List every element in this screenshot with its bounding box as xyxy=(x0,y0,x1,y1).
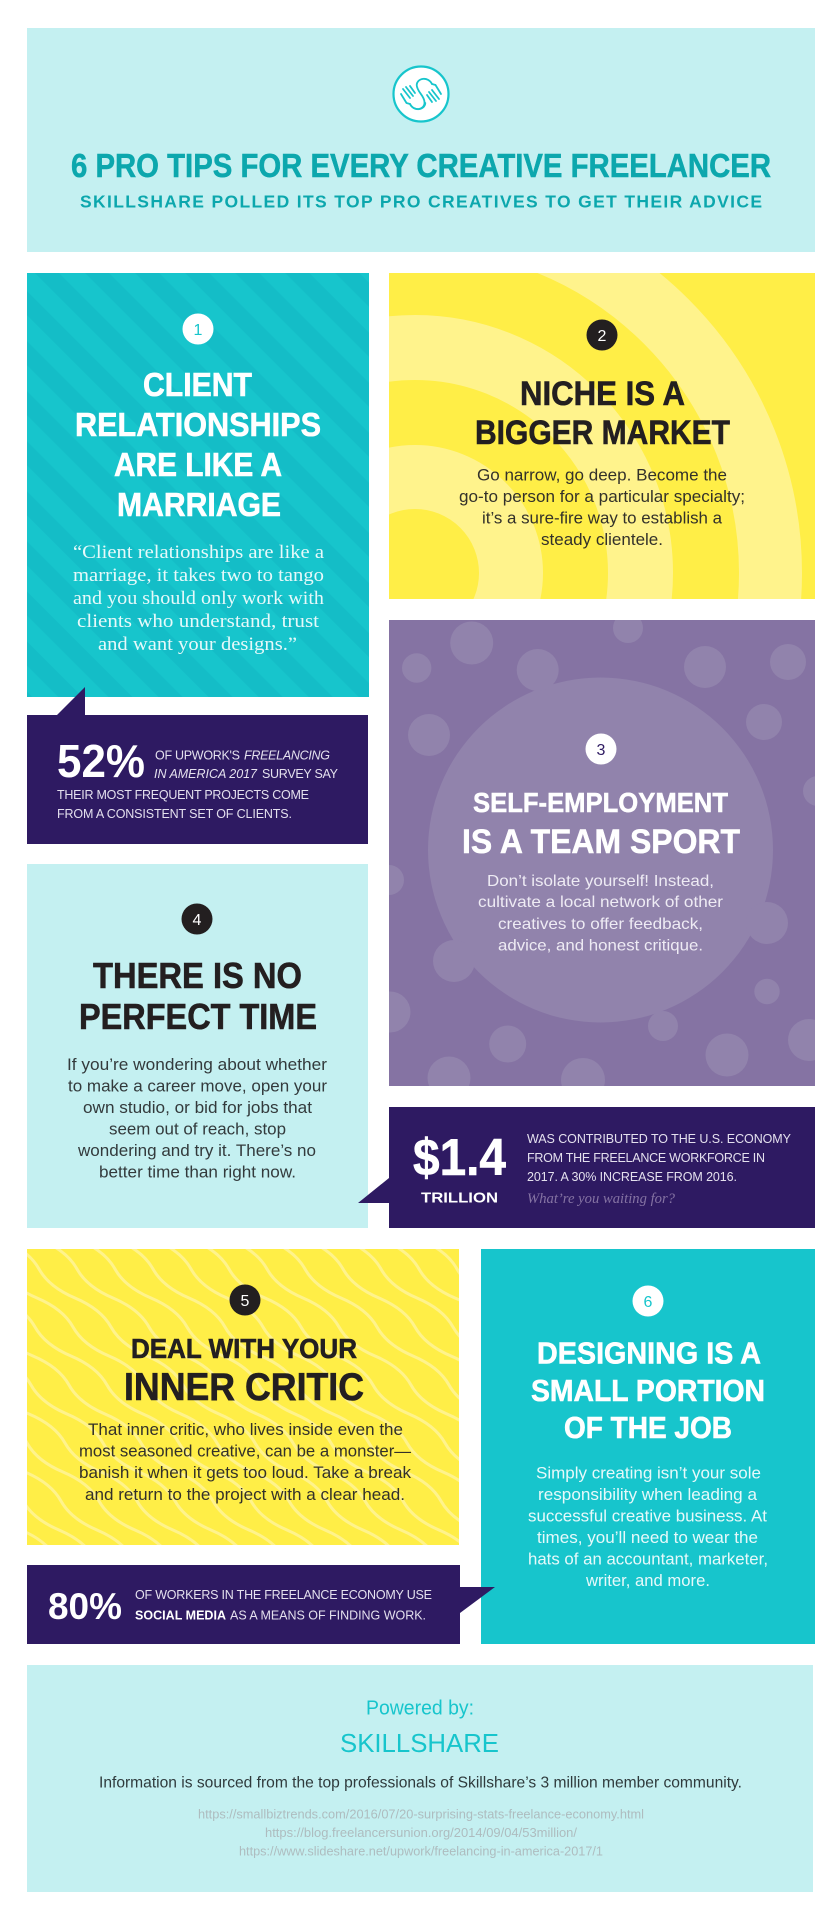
body text: advice, and honest critique. xyxy=(498,938,703,954)
quote xyxy=(73,543,324,655)
heading: SMALL PORTION xyxy=(531,1373,765,1408)
heading: MARRIAGE xyxy=(117,486,281,523)
body text: steady clientele. xyxy=(541,531,663,549)
heading: DESIGNING IS A xyxy=(537,1336,761,1370)
body text: times, you’ll need to wear the xyxy=(537,1529,758,1547)
body text: Go narrow, go deep. Become the xyxy=(477,466,727,484)
quote: and want your designs.” xyxy=(98,635,297,655)
heading xyxy=(531,1336,765,1445)
source links: https://smallbiztrends.com/2016/07/20-surprising-stats-freelance-economy.html xyxy=(198,1808,644,1822)
number badge 1: 1 xyxy=(194,322,203,339)
stat text xyxy=(527,1132,792,1184)
body text: creatives to offer feedback, xyxy=(498,916,703,933)
panel: footer xyxy=(27,1665,813,1892)
body text xyxy=(67,1056,328,1182)
powered by: Powered by: xyxy=(366,1698,474,1720)
heading xyxy=(462,787,740,861)
body text: cultivate a local network of other xyxy=(478,894,724,911)
callout: 80% stat xyxy=(27,1565,495,1644)
stat number: 52% xyxy=(57,735,145,787)
striped background xyxy=(27,273,369,697)
stat text: OF UPWORK'S xyxy=(155,748,240,762)
body text: writer, and more. xyxy=(585,1572,710,1590)
body text: to make a career move, open your xyxy=(68,1078,328,1096)
panel: tip 4 no perfect time xyxy=(27,864,368,1228)
body text: seem out of reach, stop xyxy=(109,1120,286,1138)
body text: If you’re wondering about whether xyxy=(67,1056,328,1074)
body text: it’s a sure-fire way to establish a xyxy=(482,510,723,528)
heading: THERE IS NO xyxy=(93,955,302,996)
tagline: What’re you waiting for? xyxy=(527,1191,676,1207)
stat text: WAS CONTRIBUTED TO THE U.S. ECONOMY xyxy=(527,1132,792,1146)
body text xyxy=(528,1464,768,1590)
number badge 4: 4 xyxy=(193,912,202,929)
stat text: FROM A CONSISTENT SET OF CLIENTS. xyxy=(57,807,292,821)
callout box with tail xyxy=(27,687,368,844)
callout: $1.4 trillion stat xyxy=(358,1107,815,1228)
quote: “Client relationships are like a xyxy=(73,543,324,563)
stat text: FREELANCING xyxy=(244,748,330,762)
callout: 52% stat xyxy=(27,687,368,844)
heading: INNER CRITIC xyxy=(124,1366,364,1409)
body text xyxy=(79,1421,412,1504)
heading: CLIENT xyxy=(143,366,252,403)
stat unit: TRILLION xyxy=(421,1190,498,1206)
number badge 2: 2 xyxy=(598,328,607,345)
callout box with tail xyxy=(27,1565,495,1644)
stat number: $1.4 xyxy=(413,1129,506,1187)
heading: ARE LIKE A xyxy=(114,446,282,483)
source links xyxy=(198,1808,644,1859)
source links: https://blog.freelancersunion.org/2014/09/04/53million/ xyxy=(265,1826,578,1840)
body text: Simply creating isn’t your sole xyxy=(536,1464,761,1482)
heading xyxy=(124,1333,364,1409)
footer background xyxy=(27,1665,813,1892)
purple background xyxy=(389,620,815,1086)
heading: NICHE IS A xyxy=(520,375,685,413)
callout box with tail xyxy=(358,1107,815,1228)
body text: hats of an accountant, marketer, xyxy=(528,1550,768,1568)
heading xyxy=(75,366,321,523)
light blue background xyxy=(27,864,368,1228)
panel: header xyxy=(27,28,815,252)
heading: SELF-EMPLOYMENT xyxy=(473,787,728,818)
body text xyxy=(459,466,745,549)
body text: responsibility when leading a xyxy=(538,1486,758,1504)
number badge 1 xyxy=(182,314,214,344)
heading: RELATIONSHIPS xyxy=(75,406,321,443)
body text: successful creative business. At xyxy=(528,1508,767,1526)
source links: https://www.slideshare.net/upwork/freelancing-in-america-2017/1 xyxy=(239,1845,603,1859)
panel: tip 3 team sport xyxy=(389,620,815,1086)
stat number: 80% xyxy=(48,1586,122,1627)
panel: tip 6 designing xyxy=(481,1249,815,1644)
subtitle: SKILLSHARE POLLED ITS TOP PRO CREATIVES TO GET THEIR ADVICE xyxy=(80,192,762,212)
body text: That inner critic, who lives inside even the xyxy=(88,1421,403,1439)
yellow background xyxy=(389,273,815,599)
icon: Skillshare hands logo xyxy=(394,66,448,122)
heading xyxy=(79,955,317,1037)
source note: Information is sourced from the top professionals of Skillshare’s 3 million member community. xyxy=(99,1774,742,1792)
heading: DEAL WITH YOUR xyxy=(131,1333,357,1364)
number badge 5 xyxy=(230,1284,260,1316)
title: 6 PRO TIPS FOR EVERY CREATIVE FREELANCER xyxy=(71,147,771,184)
panel: tip 5 inner critic xyxy=(27,1249,459,1545)
stat text: 2017. A 30% INCREASE FROM 2016. xyxy=(527,1170,737,1184)
number badge 3 xyxy=(586,734,616,764)
number badge 5: 5 xyxy=(241,1293,250,1310)
heading: PERFECT TIME xyxy=(79,996,317,1037)
dots xyxy=(389,620,815,1086)
brand name: SKILLSHARE xyxy=(340,1728,499,1758)
stat text: FROM THE FREELANCE WORKFORCE IN xyxy=(527,1151,765,1165)
stat text: SOCIAL MEDIA xyxy=(135,1608,226,1622)
body text: banish it when it gets too loud. Take a break xyxy=(79,1464,412,1482)
concentric rings xyxy=(389,273,802,599)
heading: BIGGER MARKET xyxy=(475,414,730,452)
body text: better time than right now. xyxy=(99,1164,296,1182)
wavy lines xyxy=(27,1249,459,1545)
body text: own studio, or bid for jobs that xyxy=(83,1099,312,1117)
heading xyxy=(475,375,730,452)
stat text: OF WORKERS IN THE FREELANCE ECONOMY USE xyxy=(135,1588,432,1602)
stat text: AS A MEANS OF FINDING WORK. xyxy=(230,1608,426,1622)
heading: OF THE JOB xyxy=(564,1410,732,1445)
body text: most seasoned creative, can be a monster— xyxy=(79,1443,411,1461)
body text: wondering and try it. There’s no xyxy=(77,1142,316,1160)
number badge 3: 3 xyxy=(597,742,606,759)
number badge 4 xyxy=(182,904,212,934)
panel: tip 2 niche xyxy=(389,273,815,599)
number badge 6: 6 xyxy=(644,1294,653,1311)
body text: and return to the project with a clear head. xyxy=(85,1486,405,1504)
header background xyxy=(27,28,815,252)
number badge 6 xyxy=(632,1286,664,1316)
number badge 2 xyxy=(586,320,618,350)
stat text xyxy=(57,748,339,821)
yellow background xyxy=(27,1249,459,1545)
body text xyxy=(478,873,724,954)
teal background xyxy=(481,1249,815,1644)
stat text: SURVEY SAY xyxy=(262,767,339,781)
stat text: IN AMERICA 2017 xyxy=(154,767,258,781)
stat text xyxy=(135,1588,432,1622)
quote: marriage, it takes two to tango xyxy=(73,566,324,586)
quote: and you should only work with xyxy=(73,589,324,609)
panel: tip 1 client relationships xyxy=(27,273,369,697)
stat text: THEIR MOST FREQUENT PROJECTS COME xyxy=(57,788,309,802)
body text: go-to person for a particular specialty; xyxy=(459,488,745,506)
heading: IS A TEAM SPORT xyxy=(462,823,740,861)
quote: clients who understand, trust xyxy=(77,612,320,632)
body text: Don’t isolate yourself! Instead, xyxy=(487,873,714,890)
